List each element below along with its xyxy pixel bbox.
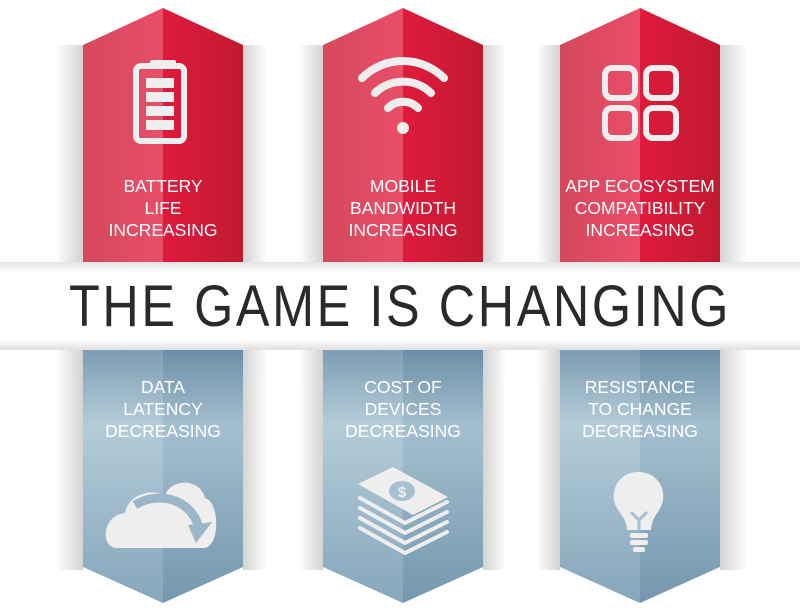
- banner: resistance: [560, 350, 720, 603]
- label: latency: DATA: [141, 377, 185, 397]
- icon: cloud: [106, 483, 216, 548]
- icon: money stack: [358, 467, 448, 553]
- label: resistance: TO CHANGE: [588, 399, 692, 419]
- banner: bandwidth: [323, 8, 483, 262]
- banner: apps: [560, 8, 720, 262]
- label: apps: COMPATIBILITY: [575, 198, 706, 218]
- label: battery: LIFE: [145, 198, 181, 218]
- icon: money stack: $: [398, 484, 407, 501]
- label: latency: DECREASING: [105, 421, 221, 441]
- banner: battery: [83, 8, 243, 262]
- label: cost: COST OF: [364, 377, 442, 397]
- label: cost: DECREASING: [345, 421, 461, 441]
- icon: battery: [136, 60, 184, 141]
- banner: cost: [323, 350, 483, 603]
- label: resistance: DECREASING: [582, 421, 698, 441]
- label: battery: BATTERY: [123, 176, 203, 196]
- icon: light bulb: [614, 472, 663, 552]
- icon: wifi: [362, 61, 444, 134]
- label: resistance: RESISTANCE: [585, 377, 695, 397]
- label: bandwidth: BANDWIDTH: [350, 198, 456, 218]
- label: bandwidth: MOBILE: [370, 176, 436, 196]
- banner: latency: [83, 350, 243, 603]
- label: apps: APP ECOSYSTEM: [565, 176, 715, 196]
- label: apps: INCREASING: [586, 220, 694, 240]
- label: latency: LATENCY: [123, 399, 203, 419]
- label: cost: DEVICES: [365, 399, 441, 419]
- label: battery: INCREASING: [109, 220, 217, 240]
- icon: app grid: [605, 68, 676, 138]
- title band: [0, 262, 800, 350]
- label: bandwidth: INCREASING: [349, 220, 457, 240]
